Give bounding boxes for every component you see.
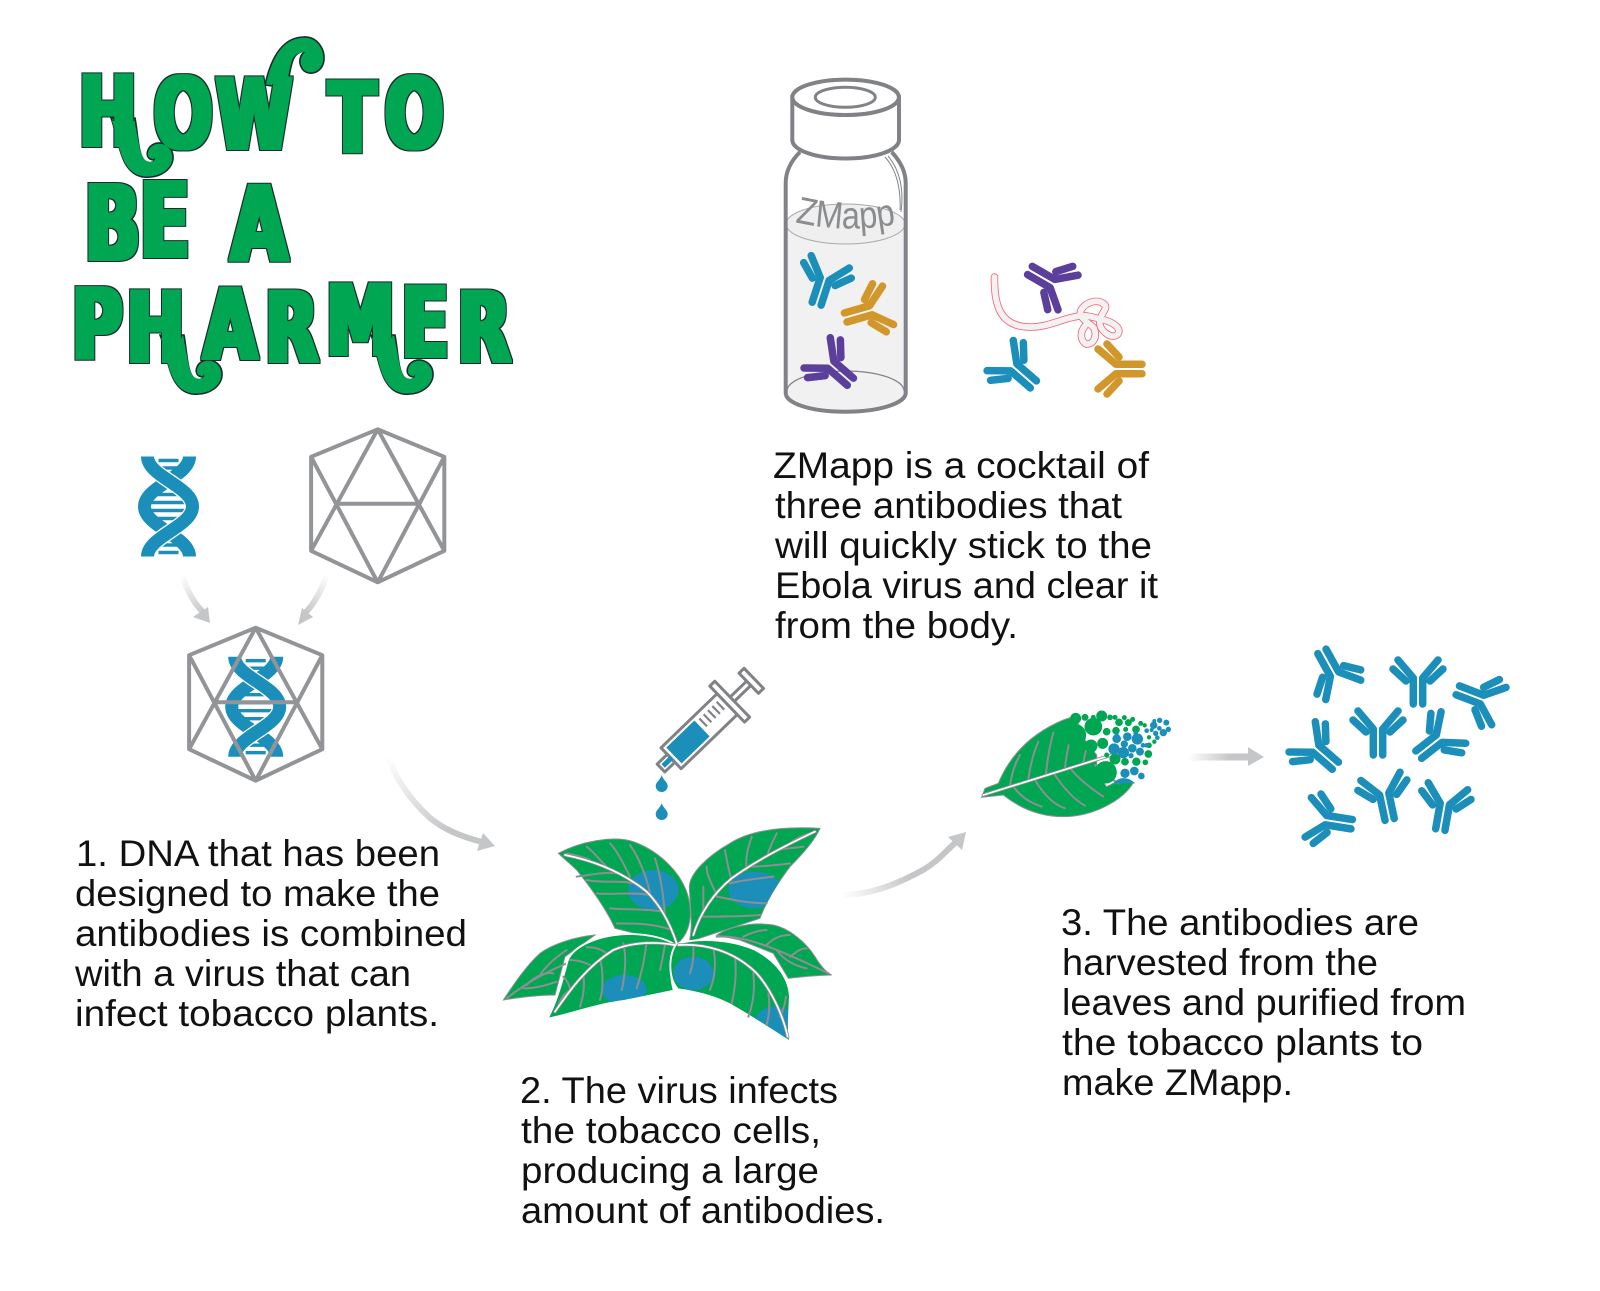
vial liquid	[786, 204, 905, 412]
text: step 2: the tobacco cells,	[521, 1110, 821, 1151]
text: step 2: amount of antibodies.	[521, 1190, 885, 1231]
antibodies in vial	[793, 254, 895, 401]
leaf front left	[549, 935, 674, 1017]
icon: harvested dissolving leaf	[982, 711, 1170, 817]
icon: syringe	[644, 660, 771, 786]
text: step 1: designed to make the	[75, 873, 440, 914]
icon: infected tobacco plant	[503, 828, 832, 1040]
leaf front right	[671, 941, 796, 1040]
icon: virus capsid	[311, 429, 444, 582]
text: step 2: 2. The virus infects	[520, 1070, 838, 1111]
arrow: plant to harvested leaf	[842, 832, 966, 895]
text: step 3: make ZMapp.	[1062, 1062, 1293, 1103]
leaf far left	[503, 935, 595, 1000]
liquid surface	[786, 204, 905, 244]
title line: PHARMER: PHARMER	[72, 263, 511, 385]
green cell dots	[1064, 711, 1156, 783]
vial floor	[787, 371, 904, 391]
text: step 2: producing a large	[521, 1150, 819, 1191]
icon: cluster of purified antibodies	[1286, 639, 1508, 849]
arrow: DNA to combined virus	[182, 575, 210, 623]
arrow: capsid to combined virus	[298, 575, 327, 625]
icon: antibodies attacking virus	[984, 249, 1142, 403]
leaf upper right	[689, 828, 820, 942]
text: ZMapp explanation: Ebola virus and clear it	[775, 565, 1159, 606]
icon: virus containing DNA	[189, 628, 322, 781]
text: ZMapp explanation: from the body.	[775, 605, 1018, 646]
blue antibody dots	[1109, 718, 1170, 783]
text: step 3	[1061, 902, 1466, 1103]
text: ZMapp explanation: three antibodies that	[775, 485, 1123, 526]
leaf body	[982, 716, 1133, 817]
icon: falling drops	[656, 775, 668, 820]
text: step 3: the tobacco plants to	[1062, 1022, 1423, 1063]
text: ZMapp explanation	[773, 445, 1159, 646]
text: step 2	[520, 1070, 885, 1231]
arrow: step 1 to plant	[387, 755, 495, 851]
text: step 1: with a virus that can	[74, 953, 411, 994]
vial label: ZMapp	[796, 197, 894, 236]
icon: DNA helix	[144, 456, 192, 556]
text: step 1	[74, 833, 467, 1034]
title line: HOW TO: HOW TO	[79, 54, 443, 175]
vial outline	[786, 152, 906, 412]
text: step 1: infect tobacco plants.	[75, 993, 439, 1034]
title swash fills	[112, 38, 432, 393]
text: ZMapp explanation: ZMapp is a cocktail of	[773, 445, 1150, 486]
icon: ZMapp vial	[784, 78, 908, 414]
vial highlight	[885, 156, 902, 212]
icon: Ebola virus filament	[994, 277, 1119, 344]
title line: BE A: BE A	[85, 162, 288, 286]
text: step 1: antibodies is combined	[75, 913, 467, 954]
title swash outlines	[111, 37, 433, 394]
leaf upper left	[558, 839, 690, 944]
title	[72, 37, 511, 394]
text: step 3: leaves and purified from	[1062, 982, 1466, 1023]
leaf far right	[717, 924, 832, 978]
text: step 3: harvested from the	[1062, 942, 1378, 983]
text: ZMapp explanation: will quickly stick to the	[774, 525, 1152, 566]
text: step 1: 1. DNA that has been	[76, 833, 440, 874]
vial cap	[792, 97, 899, 158]
arrow: leaf to antibodies	[1188, 747, 1264, 766]
text: step 3: 3. The antibodies are	[1061, 902, 1419, 943]
